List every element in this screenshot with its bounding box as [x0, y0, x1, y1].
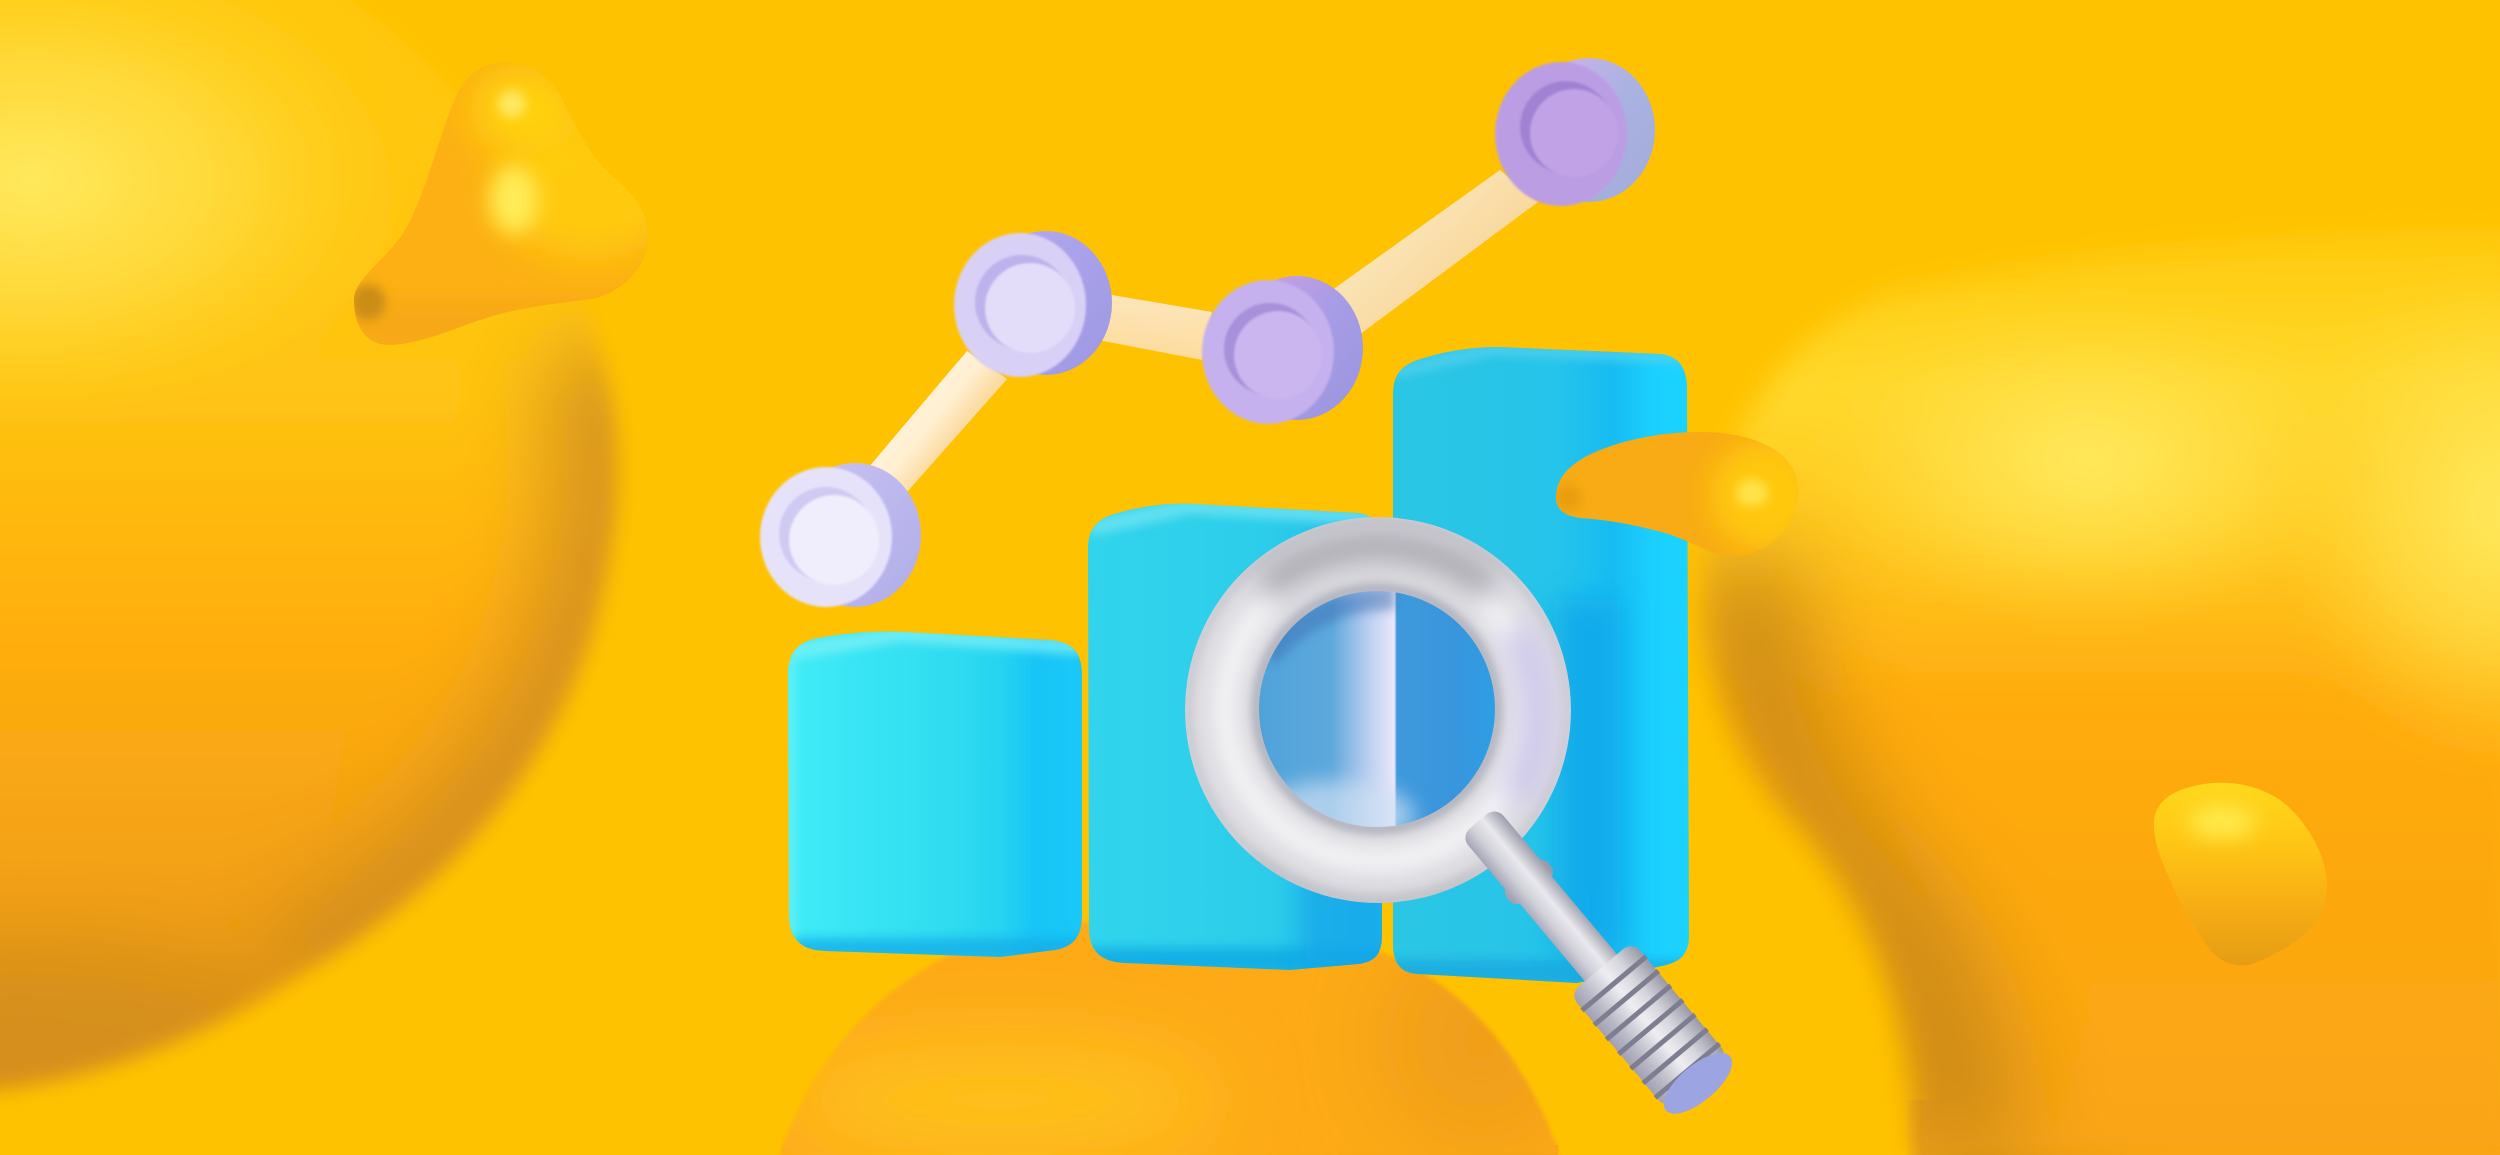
node 2: [954, 231, 1112, 377]
blob: triangular top left: [354, 62, 648, 345]
node 4: [1495, 58, 1655, 206]
threaded grip: [1569, 941, 1730, 1110]
bar chart: [782, 347, 1690, 986]
bottom edge fill of right sphere: [1905, 1100, 2500, 1155]
node 1: [760, 463, 921, 607]
bar: tall: [1390, 347, 1690, 986]
collar: [1501, 856, 1557, 908]
icon: magnifying glass: [1185, 517, 1742, 1124]
shaft: [1517, 874, 1622, 987]
decorative blurred right sphere: [1680, 200, 2500, 1155]
lens: [1259, 591, 1495, 827]
grip end cap: [1654, 1043, 1742, 1124]
neck: [1461, 807, 1548, 899]
node 3: [1202, 276, 1363, 424]
bar: short: [782, 632, 1085, 962]
magnifier handle: [1446, 794, 1742, 1124]
connector 1: [868, 351, 1007, 500]
blob: pebble right: [2154, 783, 2327, 965]
lens ring: [1185, 517, 1571, 908]
decorative bottom sphere: [780, 920, 1560, 1155]
connector 3: [1328, 170, 1538, 335]
blob: drop over tall bar: [1554, 432, 1820, 556]
line chart: [760, 58, 1655, 607]
bottom edge fill of bottom sphere: [782, 1145, 1558, 1155]
connector 2: [1093, 293, 1212, 360]
bar: medium: [1085, 504, 1390, 974]
decorative blurred left sphere: [0, 0, 660, 1120]
